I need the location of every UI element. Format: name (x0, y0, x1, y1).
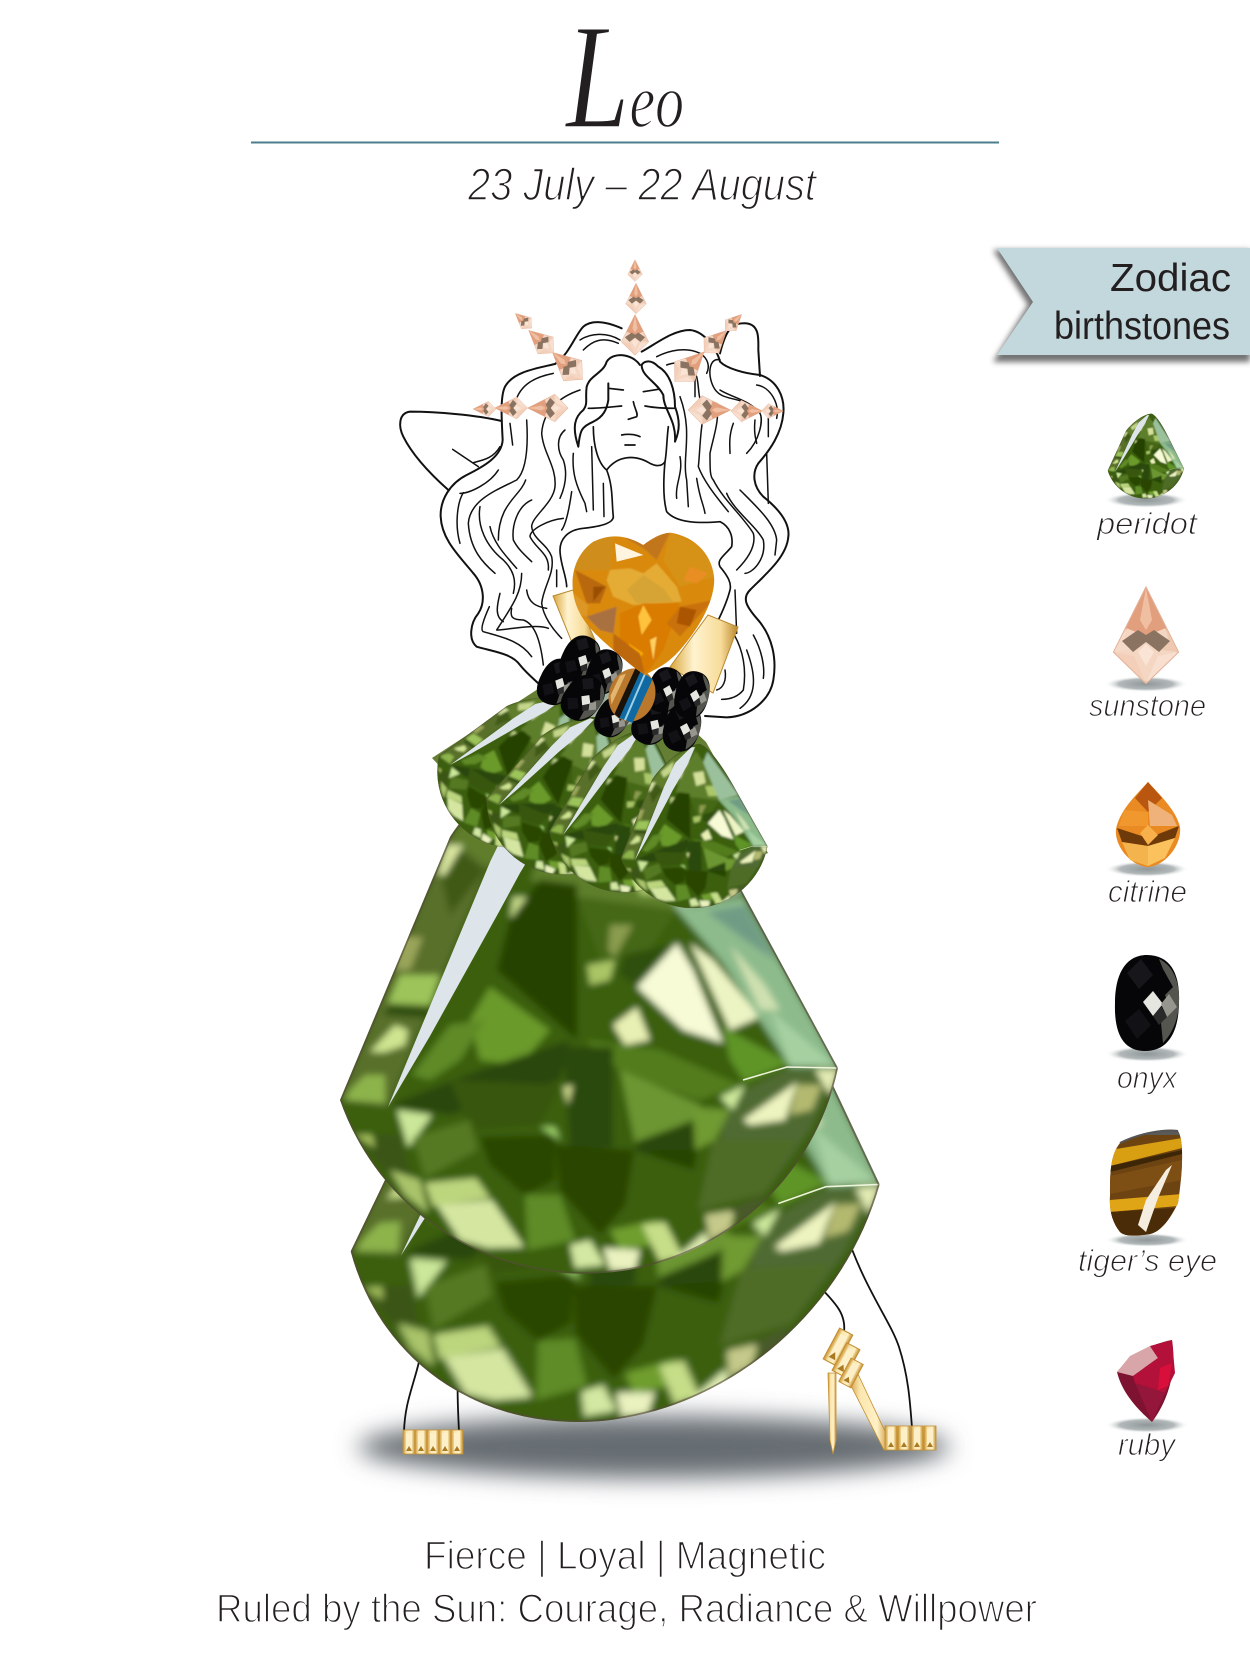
swatch: sunstone: sunstone (1089, 688, 1206, 723)
floor shadow (358, 1416, 950, 1478)
divider rule (251, 142, 999, 144)
necklace: tiger's eye bead (601, 662, 663, 728)
swatch: onyx: onyx (1117, 1060, 1178, 1095)
swatch: tiger's eye (1078, 1125, 1217, 1278)
swatch: peridot: peridot (1096, 506, 1198, 541)
swatch: tiger's eye: tiger’s eye (1078, 1243, 1217, 1278)
skirt: middle tier (320, 700, 860, 1290)
right shoe (823, 1328, 936, 1454)
legs (404, 1230, 912, 1432)
gold baguette sleeves (553, 590, 738, 693)
ribbon: zodiac birthstones: birthstones (1054, 305, 1230, 348)
skirt: lower tier (313, 789, 935, 1456)
swatch: citrine: citrine (1108, 874, 1187, 909)
sunstone crown (473, 260, 783, 424)
swatch: ruby: ruby (1118, 1427, 1177, 1462)
swatch: onyx (1105, 955, 1189, 1095)
left shoe (403, 1430, 463, 1454)
caption: ruling planet: Ruled by the Sun: Courage, Radiance & Willpower (216, 1587, 1037, 1631)
line art: woman with long hair (400, 322, 789, 717)
ribbon: zodiac birthstones: Zodiac (1110, 257, 1231, 300)
citrine heart (572, 532, 714, 675)
swatch: ruby (1105, 1340, 1189, 1462)
swatch: peridot (1096, 409, 1198, 541)
skirt: top tier of four overlapping peridot fans (405, 652, 775, 914)
necklace: onyx beads (531, 630, 713, 756)
date range: 23 July – 22 August (467, 159, 818, 210)
ribbon: zodiac birthstones (993, 248, 1250, 362)
swatch: citrine (1105, 782, 1189, 909)
swatch: sunstone (1089, 588, 1206, 723)
caption: traits: Fierce | Loyal | Magnetic (424, 1534, 826, 1578)
